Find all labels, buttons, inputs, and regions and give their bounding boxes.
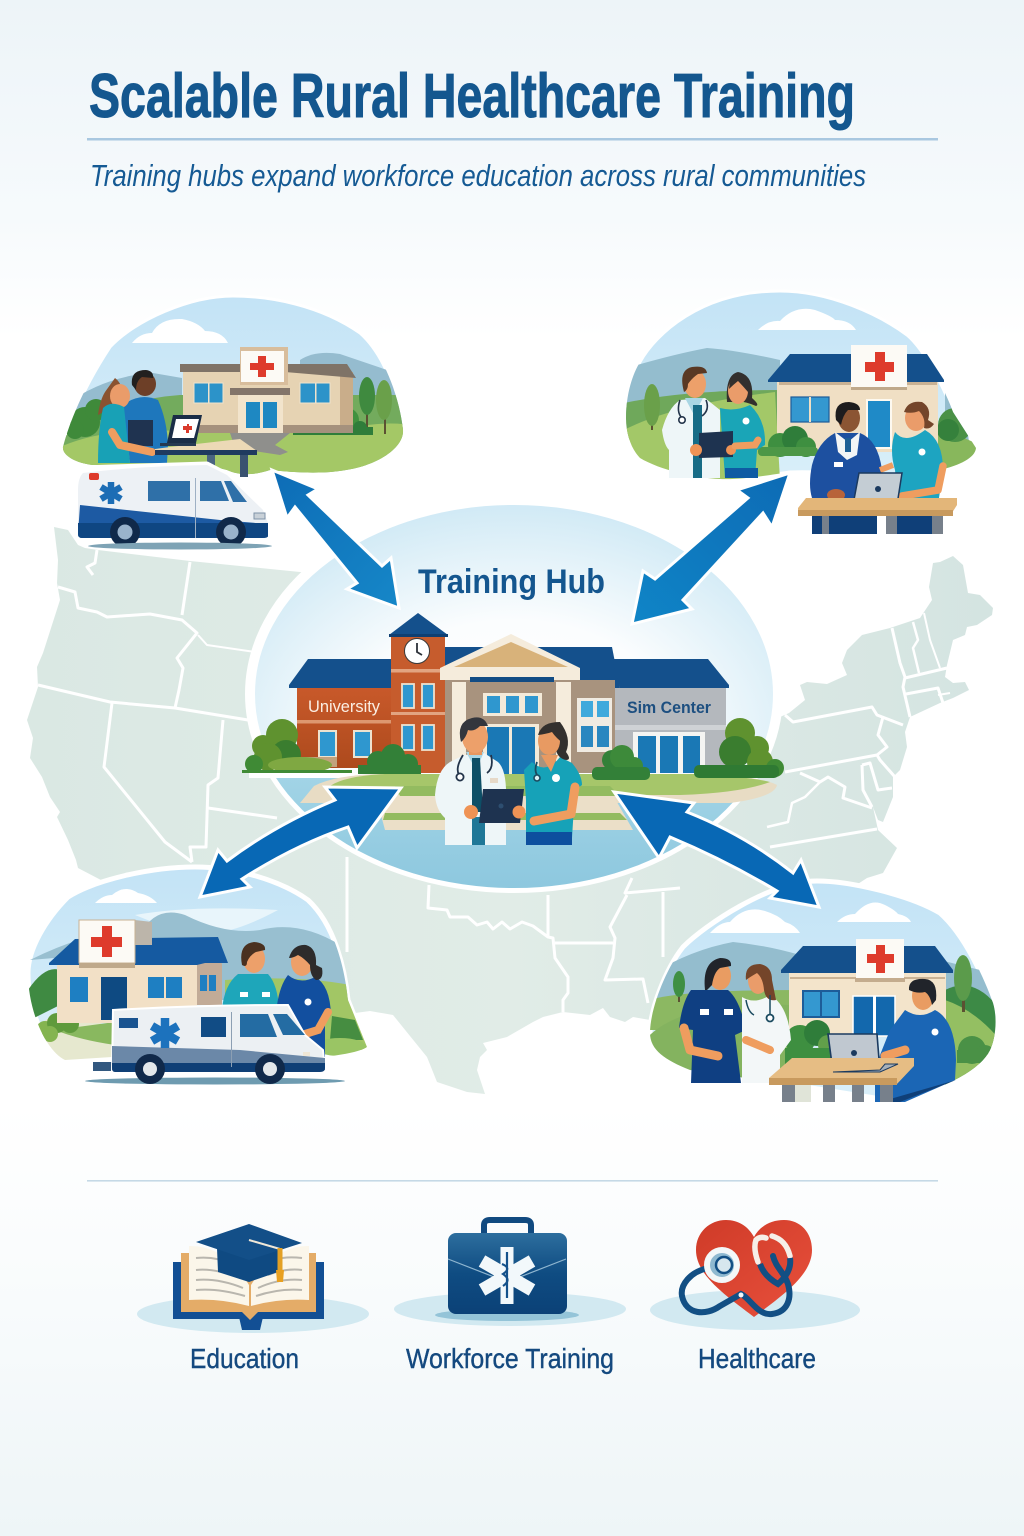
building: University wing xyxy=(289,659,393,768)
building: center entrance xyxy=(440,634,615,774)
clinic building xyxy=(49,920,228,1023)
tablet xyxy=(464,789,526,823)
arrow: hub to top-left clinic xyxy=(272,470,399,608)
ambulance xyxy=(85,1005,345,1084)
people: two clinicians xyxy=(222,942,331,1057)
desk and laptop xyxy=(798,473,957,534)
people: administrator and nurse at desk xyxy=(810,402,943,501)
table and laptop xyxy=(155,415,257,477)
building: Sim Center wing xyxy=(612,659,729,773)
clinic building xyxy=(180,347,356,455)
water under the campus xyxy=(276,775,752,888)
panel: rural clinic bottom-left xyxy=(28,867,370,1084)
icon: heart and stethoscope xyxy=(650,1220,860,1330)
scenery xyxy=(28,889,370,1060)
label: Education: Education xyxy=(190,1343,299,1374)
panel: rural clinic top-right xyxy=(620,291,980,534)
building: clock tower xyxy=(389,613,448,773)
subtitle: Training hubs expand workforce education across rural communities xyxy=(90,158,866,193)
scenery xyxy=(620,309,980,480)
label: University: University xyxy=(308,697,380,716)
people at table xyxy=(98,370,168,463)
bushes: right xyxy=(592,718,784,780)
icon: medical briefcase xyxy=(394,1220,626,1326)
heading: Training Hub: Training Hub xyxy=(418,563,605,601)
panel: central training hub xyxy=(240,500,790,895)
arrow: hub to top-right clinic xyxy=(632,473,790,624)
label: Workforce Training: Workforce Training xyxy=(406,1343,614,1374)
clock xyxy=(404,638,430,664)
panel: rural clinic top-left xyxy=(60,296,410,550)
label: Sim Center: Sim Center xyxy=(627,698,711,717)
building: central back roof xyxy=(445,647,620,688)
clinic building xyxy=(781,939,953,1064)
label: Healthcare: Healthcare xyxy=(698,1343,816,1374)
people: doctor and nurse xyxy=(662,367,765,478)
clinic building xyxy=(758,345,944,457)
arrow: hub to bottom-right clinic xyxy=(614,792,819,907)
campus ground xyxy=(249,773,777,830)
bushes: left xyxy=(242,719,421,774)
map of the United States xyxy=(27,527,993,1094)
person: doctor with tablet xyxy=(435,717,506,845)
person: nurse xyxy=(524,722,582,845)
person: technician with laptop xyxy=(875,979,956,1102)
icon: education book and cap xyxy=(137,1224,369,1333)
ambulance xyxy=(78,464,272,550)
people: paramedic and doctor xyxy=(679,958,791,1083)
arrow: hub to bottom-left clinic xyxy=(200,787,401,897)
scenery xyxy=(645,902,1000,1100)
desk and laptop xyxy=(769,1034,914,1102)
trees and bushes xyxy=(293,377,392,435)
panel: rural clinic bottom-right xyxy=(645,881,1000,1102)
scenery xyxy=(60,319,410,480)
